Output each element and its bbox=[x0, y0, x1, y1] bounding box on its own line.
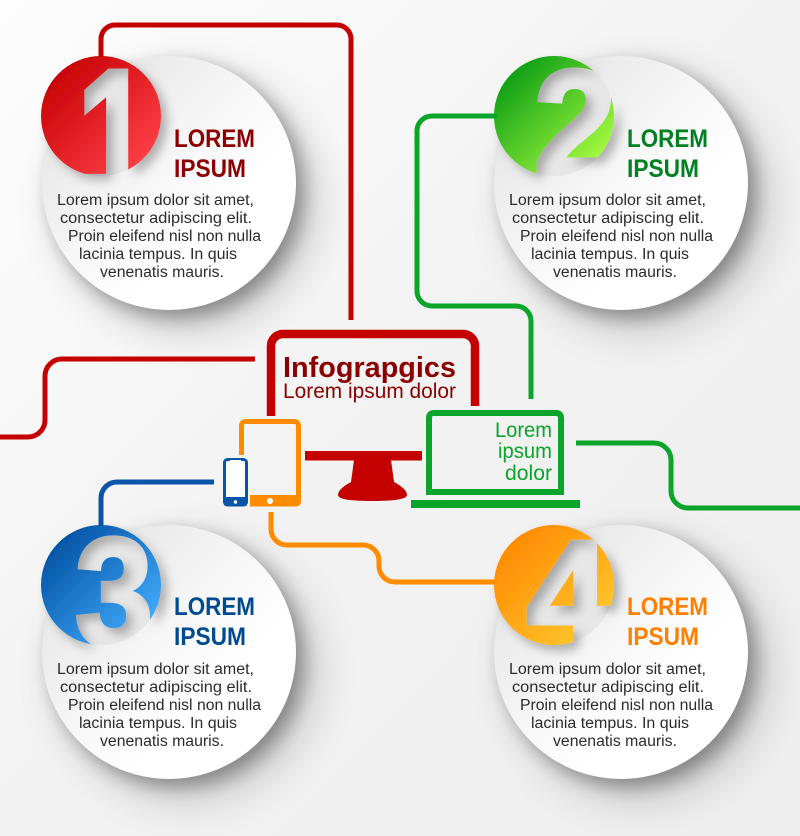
body text 3: venenatis mauris. bbox=[100, 733, 224, 750]
number badge 3: 3 bbox=[75, 506, 153, 680]
panel: step 4 bbox=[494, 511, 766, 797]
body text 1: lacinia tempus. In quis bbox=[79, 246, 237, 263]
number badge 2 bbox=[494, 56, 626, 182]
number badge 1 bbox=[41, 56, 172, 186]
heading 2: LOREM bbox=[627, 125, 708, 153]
paper circle 1 with shadow bbox=[42, 56, 314, 328]
laptop text: ipsum bbox=[498, 440, 552, 463]
heading 2: IPSUM bbox=[627, 155, 699, 183]
body text 3 bbox=[57, 661, 261, 750]
body text 4 bbox=[509, 661, 713, 750]
heading 4: IPSUM bbox=[627, 623, 699, 651]
panel: step 3 bbox=[41, 506, 314, 797]
heading 2 bbox=[627, 125, 708, 183]
heading 1 bbox=[174, 125, 255, 183]
number badge 1: 1 bbox=[77, 33, 151, 234]
body text 4: Proin eleifend nisl non nulla bbox=[520, 697, 713, 714]
heading 1: LOREM bbox=[174, 125, 255, 153]
heading 3 bbox=[174, 593, 255, 651]
paper circle 3 with shadow bbox=[42, 525, 314, 797]
body text 4: lacinia tempus. In quis bbox=[531, 715, 689, 732]
number badge 2: 2 bbox=[534, 38, 616, 210]
icon: laptop bbox=[411, 413, 580, 508]
body text 2: venenatis mauris. bbox=[553, 264, 677, 281]
connector: green line to right edge bbox=[576, 443, 800, 508]
body text 1: Lorem ipsum dolor sit amet, bbox=[57, 192, 254, 209]
body text 3: Lorem ipsum dolor sit amet, bbox=[57, 661, 254, 678]
laptop text: dolor bbox=[505, 462, 552, 485]
body text 4: Lorem ipsum dolor sit amet, bbox=[509, 661, 706, 678]
body text 2: lacinia tempus. In quis bbox=[531, 246, 689, 263]
body text 2 bbox=[509, 192, 713, 281]
panel: step 2 bbox=[494, 38, 766, 328]
body text 1: venenatis mauris. bbox=[100, 264, 224, 281]
laptop text bbox=[495, 419, 552, 485]
connector: red line to left edge bbox=[0, 359, 255, 437]
number badge 4 bbox=[494, 525, 626, 656]
heading 3: LOREM bbox=[174, 593, 255, 621]
body text 3: consectetur adipiscing elit. bbox=[60, 679, 252, 696]
connector: green line to step 2 bbox=[417, 116, 531, 399]
monitor title bbox=[283, 352, 456, 403]
number badge 4: 4 bbox=[527, 511, 609, 676]
body text 1: consectetur adipiscing elit. bbox=[60, 210, 252, 227]
body text 3: Proin eleifend nisl non nulla bbox=[68, 697, 261, 714]
laptop text: Lorem bbox=[495, 419, 552, 442]
icon: desktop monitor bbox=[271, 334, 475, 501]
body text 2: Proin eleifend nisl non nulla bbox=[520, 228, 713, 245]
body text 4: consectetur adipiscing elit. bbox=[512, 679, 704, 696]
body text 1 bbox=[57, 192, 261, 281]
body text 4: venenatis mauris. bbox=[553, 733, 677, 750]
paper circle 4 with shadow bbox=[494, 525, 766, 797]
body text 1: Proin eleifend nisl non nulla bbox=[68, 228, 261, 245]
heading 4 bbox=[627, 593, 708, 651]
monitor title: Lorem ipsum dolor bbox=[283, 380, 456, 403]
number badge 3 bbox=[41, 525, 172, 652]
paper circle 2 with shadow bbox=[494, 56, 766, 328]
panel: step 1 bbox=[41, 33, 314, 328]
connector: orange line to step 4 bbox=[271, 512, 497, 582]
body text 2: consectetur adipiscing elit. bbox=[512, 210, 704, 227]
connector: blue line to step 3 bbox=[101, 482, 214, 526]
heading 3: IPSUM bbox=[174, 623, 246, 651]
body text 3: lacinia tempus. In quis bbox=[79, 715, 237, 732]
heading 4: LOREM bbox=[627, 593, 708, 621]
monitor title: Infograpgics bbox=[283, 352, 456, 384]
body text 2: Lorem ipsum dolor sit amet, bbox=[509, 192, 706, 209]
heading 1: IPSUM bbox=[174, 155, 246, 183]
connector: red line to step 1 bbox=[101, 25, 351, 320]
icon: smartphone bbox=[224, 460, 247, 506]
icon: tablet bbox=[242, 422, 301, 506]
